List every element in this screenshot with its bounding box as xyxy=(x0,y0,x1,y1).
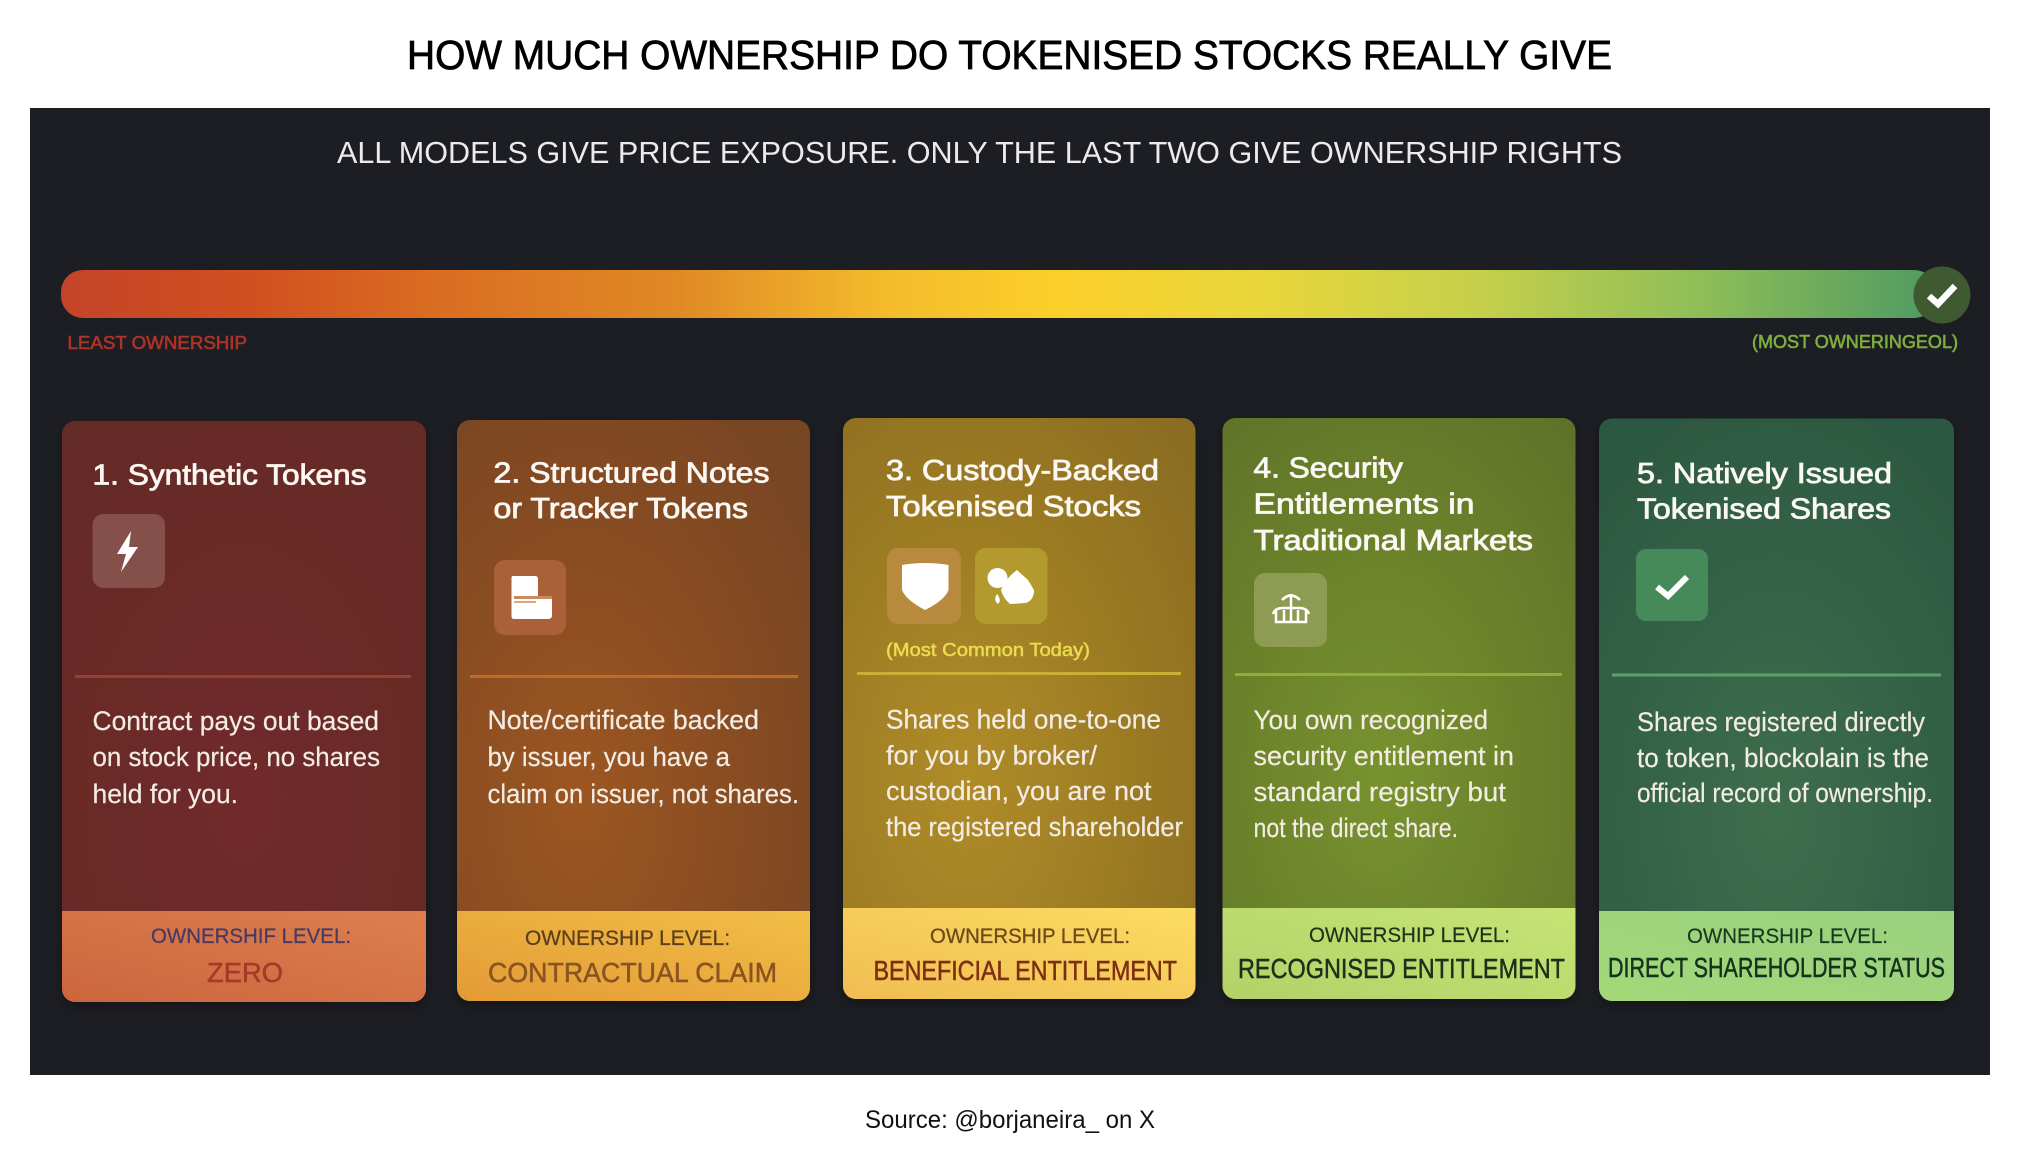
description: the registered shareholder xyxy=(886,812,1183,842)
ownership level xyxy=(488,926,777,988)
description xyxy=(886,704,1183,842)
ownership level: OWNERSHIP LEVEL: xyxy=(1309,923,1510,947)
description: to token, blockolain is the xyxy=(1637,743,1929,773)
heading xyxy=(494,458,770,525)
note: most common today: (Most Common Today) xyxy=(886,639,1090,660)
heading: 5. Natively Issued xyxy=(1637,458,1892,490)
panel: card 3 custody-backed xyxy=(843,418,1196,999)
description xyxy=(488,705,799,809)
description: for you by broker/ xyxy=(886,740,1098,770)
description: Note/certificate backed xyxy=(488,705,759,735)
ownership gradient bar xyxy=(61,266,1970,324)
title: HOW MUCH OWNERSHIP DO TOKENISED STOCKS REALLY GIVE xyxy=(407,32,1612,78)
description: on stock price, no shares xyxy=(92,742,380,772)
ownership level xyxy=(1238,923,1565,984)
ownership level: CONTRACTUAL CLAIM xyxy=(488,957,777,988)
heading: Tokenised Shares xyxy=(1637,494,1891,526)
icon: shield xyxy=(887,548,961,624)
panel: card 2 structured notes xyxy=(457,420,810,1001)
bar label: least ownership: LEAST OWNERSHIP xyxy=(68,333,247,353)
icon: lightning bolt xyxy=(92,514,165,588)
ownership level xyxy=(874,924,1177,986)
icon: check badge at the end of the bar xyxy=(1914,266,1970,324)
description: not the direct share. xyxy=(1254,813,1458,843)
icon: check xyxy=(1636,549,1708,621)
heading xyxy=(886,455,1159,523)
description xyxy=(1637,707,1933,808)
description: Shares registered directly xyxy=(1637,707,1925,737)
description: official record of ownership. xyxy=(1637,778,1933,808)
ownership level xyxy=(1608,924,1945,983)
ownership level xyxy=(151,924,351,988)
heading: 3. Custody-Backed xyxy=(886,455,1159,487)
source line: Source: @borjaneira_ on X xyxy=(865,1106,1155,1134)
panel: card 1 synthetic tokens xyxy=(62,421,426,1002)
bar label: most ownership: (MOST OWNERINGEOL) xyxy=(1752,332,1958,352)
description: Shares held one-to-one xyxy=(886,704,1161,734)
description xyxy=(1254,705,1514,843)
panel: card 5 natively issued xyxy=(1599,418,1954,1001)
ownership level: BENEFICIAL ENTITLEMENT xyxy=(874,955,1177,986)
description: You own recognized xyxy=(1254,705,1488,735)
heading xyxy=(1637,458,1892,526)
heading: 1. Synthetic Tokens xyxy=(92,460,366,492)
ownership level: OWNERSHIF LEVEL: xyxy=(151,924,351,948)
ownership level: RECOGNISED ENTITLEMENT xyxy=(1238,953,1565,984)
subtitle: ALL MODELS GIVE PRICE EXPOSURE. ONLY THE LAST TWO GIVE OWNERSHIP RIGHTS xyxy=(337,136,1622,170)
heading: 4. Security xyxy=(1254,452,1404,484)
ownership level: ZERO xyxy=(207,957,283,988)
icon: document xyxy=(494,560,566,635)
icon: coins xyxy=(975,548,1048,624)
description: standard registry but xyxy=(1254,777,1507,807)
description: custodian, you are not xyxy=(886,776,1152,806)
description: claim on issuer, not shares. xyxy=(488,779,799,809)
heading: Entitlements in xyxy=(1254,488,1474,520)
description: held for you. xyxy=(92,779,238,809)
heading: 2. Structured Notes xyxy=(494,458,770,490)
description: Contract pays out based xyxy=(92,706,379,736)
description xyxy=(92,706,380,809)
heading: Tokenised Stocks xyxy=(886,491,1141,523)
icon: institution xyxy=(1254,573,1327,647)
heading: or Tracker Tokens xyxy=(494,493,748,525)
description: security entitlement in xyxy=(1254,741,1514,771)
panel: card 4 security entitlements xyxy=(1222,418,1576,999)
ownership level: OWNERSHIP LEVEL: xyxy=(930,924,1130,948)
ownership level: OWNERSHIP LEVEL: xyxy=(1687,924,1888,948)
heading xyxy=(1254,452,1533,557)
description: by issuer, you have a xyxy=(488,742,731,772)
ownership level: OWNERSHIP LEVEL: xyxy=(525,926,730,950)
heading: Traditional Markets xyxy=(1254,525,1533,557)
